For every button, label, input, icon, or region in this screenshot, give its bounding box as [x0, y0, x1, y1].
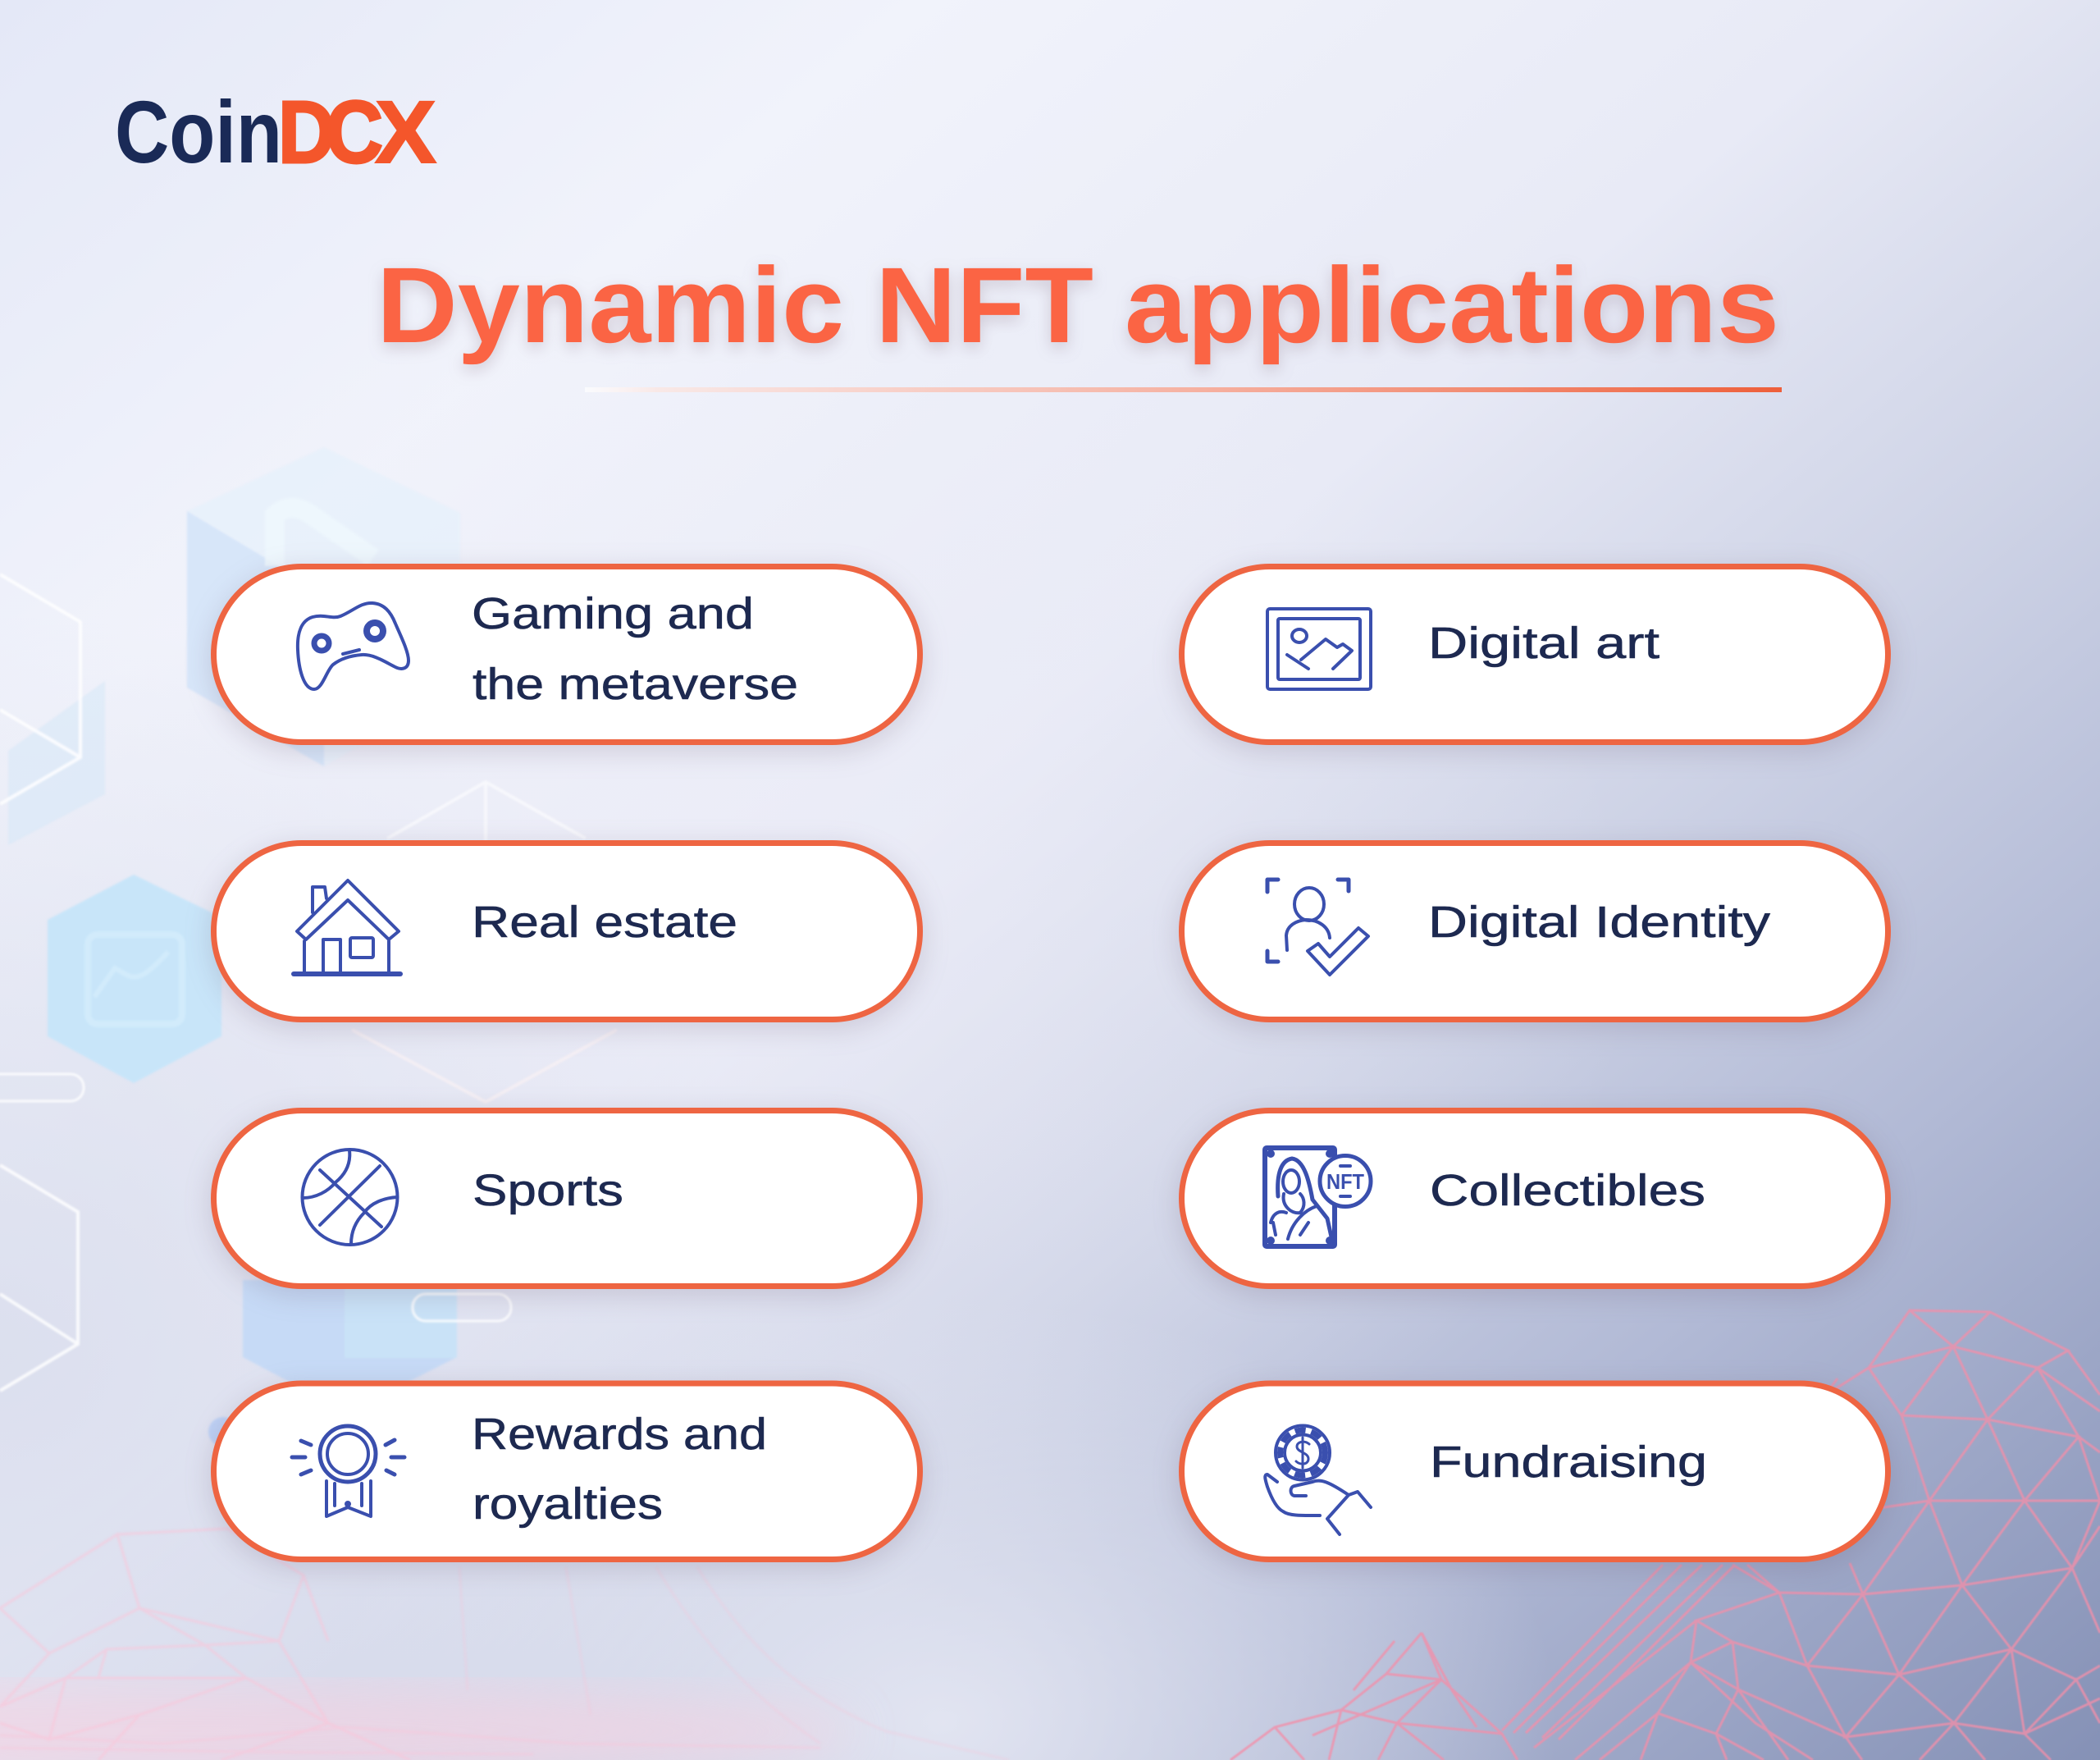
panel: Fundraising [1181, 1383, 1888, 1559]
panel: Real estate [213, 843, 920, 1019]
label: Digital art [1428, 619, 1659, 668]
panel: Digital art [1181, 566, 1888, 742]
icon: NFT portrait [1265, 1148, 1371, 1246]
background: faint pink mesh lower left and bottom [0, 1529, 1009, 1760]
label line 2: the metaverse [472, 660, 798, 709]
label line 1: Rewards and [472, 1410, 767, 1459]
logo letter: X: X [375, 82, 436, 181]
label: Digital Identity [1428, 898, 1770, 947]
panel: Rewards and royalties [213, 1383, 920, 1559]
icon: identity check [1267, 880, 1368, 975]
icon: award ribbon [292, 1426, 404, 1516]
label: Collectibles [1430, 1166, 1705, 1215]
NFT coin text: NFT [1326, 1169, 1364, 1194]
icon: basketball [302, 1150, 397, 1245]
icon: house [294, 880, 400, 974]
background: pink mesh lower right [1230, 1310, 2100, 1760]
label: Sports [472, 1166, 623, 1215]
logo letter: D: D [278, 82, 336, 181]
background: soft pink glow along lower left [0, 1686, 853, 1760]
logo letter: C: C [326, 82, 383, 181]
label: Fundraising [1430, 1438, 1707, 1487]
background: faint blue hexagons and white outlines [0, 447, 617, 1447]
panel: Digital Identity [1181, 843, 1888, 1019]
logo word: Coin: Coin [115, 82, 282, 181]
logo: CoinDCX [115, 82, 436, 181]
title: Dynamic NFT applications [377, 245, 1779, 365]
label: Real estate [472, 898, 737, 947]
panel: Gaming and the metaverse [213, 566, 920, 742]
panel: Collectibles [1181, 1111, 1888, 1287]
icon: hand holding coin [1265, 1426, 1371, 1534]
panel: Sports [213, 1111, 920, 1287]
icon: framed picture [1267, 609, 1371, 689]
label line 1: Gaming and [472, 589, 754, 638]
icon: game controller [298, 603, 409, 689]
label line 2: royalties [472, 1479, 663, 1529]
title underline [585, 387, 1782, 392]
